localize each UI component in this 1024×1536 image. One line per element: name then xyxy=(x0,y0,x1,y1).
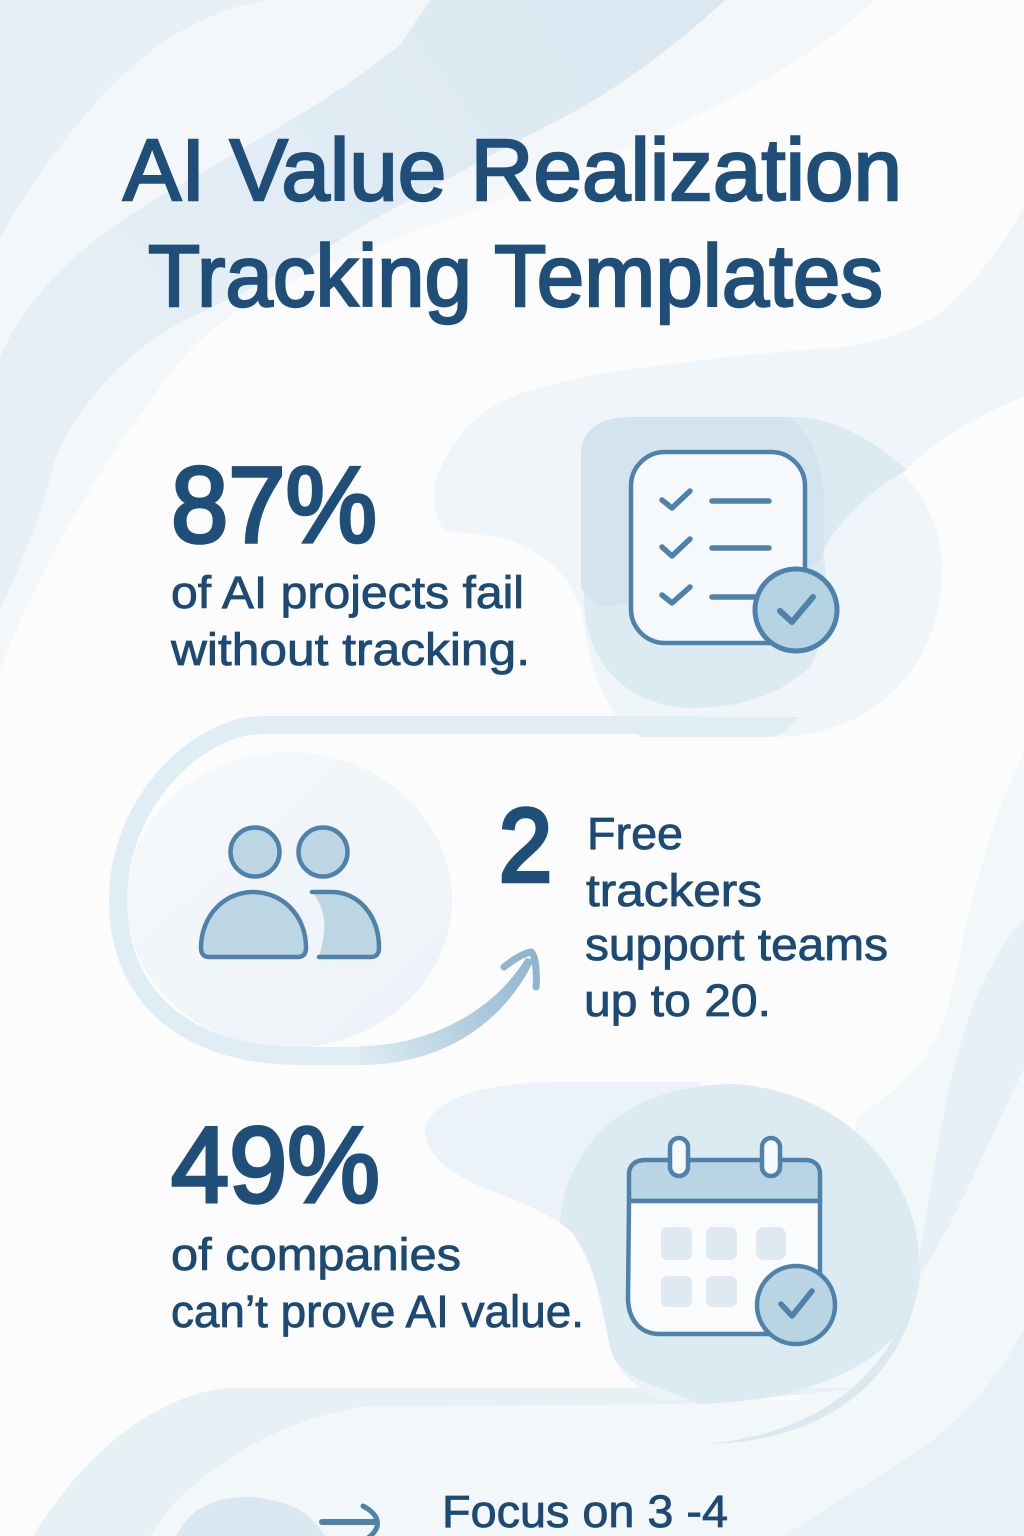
stat description: Free xyxy=(587,808,683,859)
stat description: of companies xyxy=(171,1229,461,1280)
arrow xyxy=(322,1506,377,1536)
icon: two people xyxy=(201,828,379,957)
panel: 2 free trackers stat xyxy=(118,725,888,1065)
stat description: of AI projects fail xyxy=(171,567,524,618)
panel: 87% stat xyxy=(170,417,942,737)
stat description xyxy=(171,1229,584,1337)
icon: checklist with check badge xyxy=(631,452,837,651)
arrow xyxy=(360,952,536,1065)
title xyxy=(123,122,902,325)
stat description: support teams xyxy=(585,919,888,970)
stat number: 87% xyxy=(171,444,377,565)
title: Tracking Templates xyxy=(148,228,883,325)
stat description: without tracking. xyxy=(170,624,530,675)
stat number: 2 xyxy=(499,788,552,904)
blob behind footer arrow xyxy=(176,1497,325,1536)
stat description: up to 20. xyxy=(584,975,771,1026)
blob behind people icon xyxy=(126,752,452,1048)
icon: calendar with check badge xyxy=(628,1138,835,1344)
stat description xyxy=(584,808,888,1026)
stat description xyxy=(170,567,530,675)
blob behind checklist icon xyxy=(434,417,942,737)
blob behind calendar icon xyxy=(425,1082,920,1404)
stat number: 49% xyxy=(171,1104,380,1225)
connector loop xyxy=(118,725,700,1056)
title: AI Value Realization xyxy=(123,122,902,219)
panel: focus footer xyxy=(176,1486,728,1536)
footer text: Focus on 3 -4 xyxy=(442,1486,728,1536)
panel: 49% stat xyxy=(171,1082,920,1404)
stat description: trackers xyxy=(586,865,762,916)
stat description: can’t prove AI value. xyxy=(171,1286,584,1337)
